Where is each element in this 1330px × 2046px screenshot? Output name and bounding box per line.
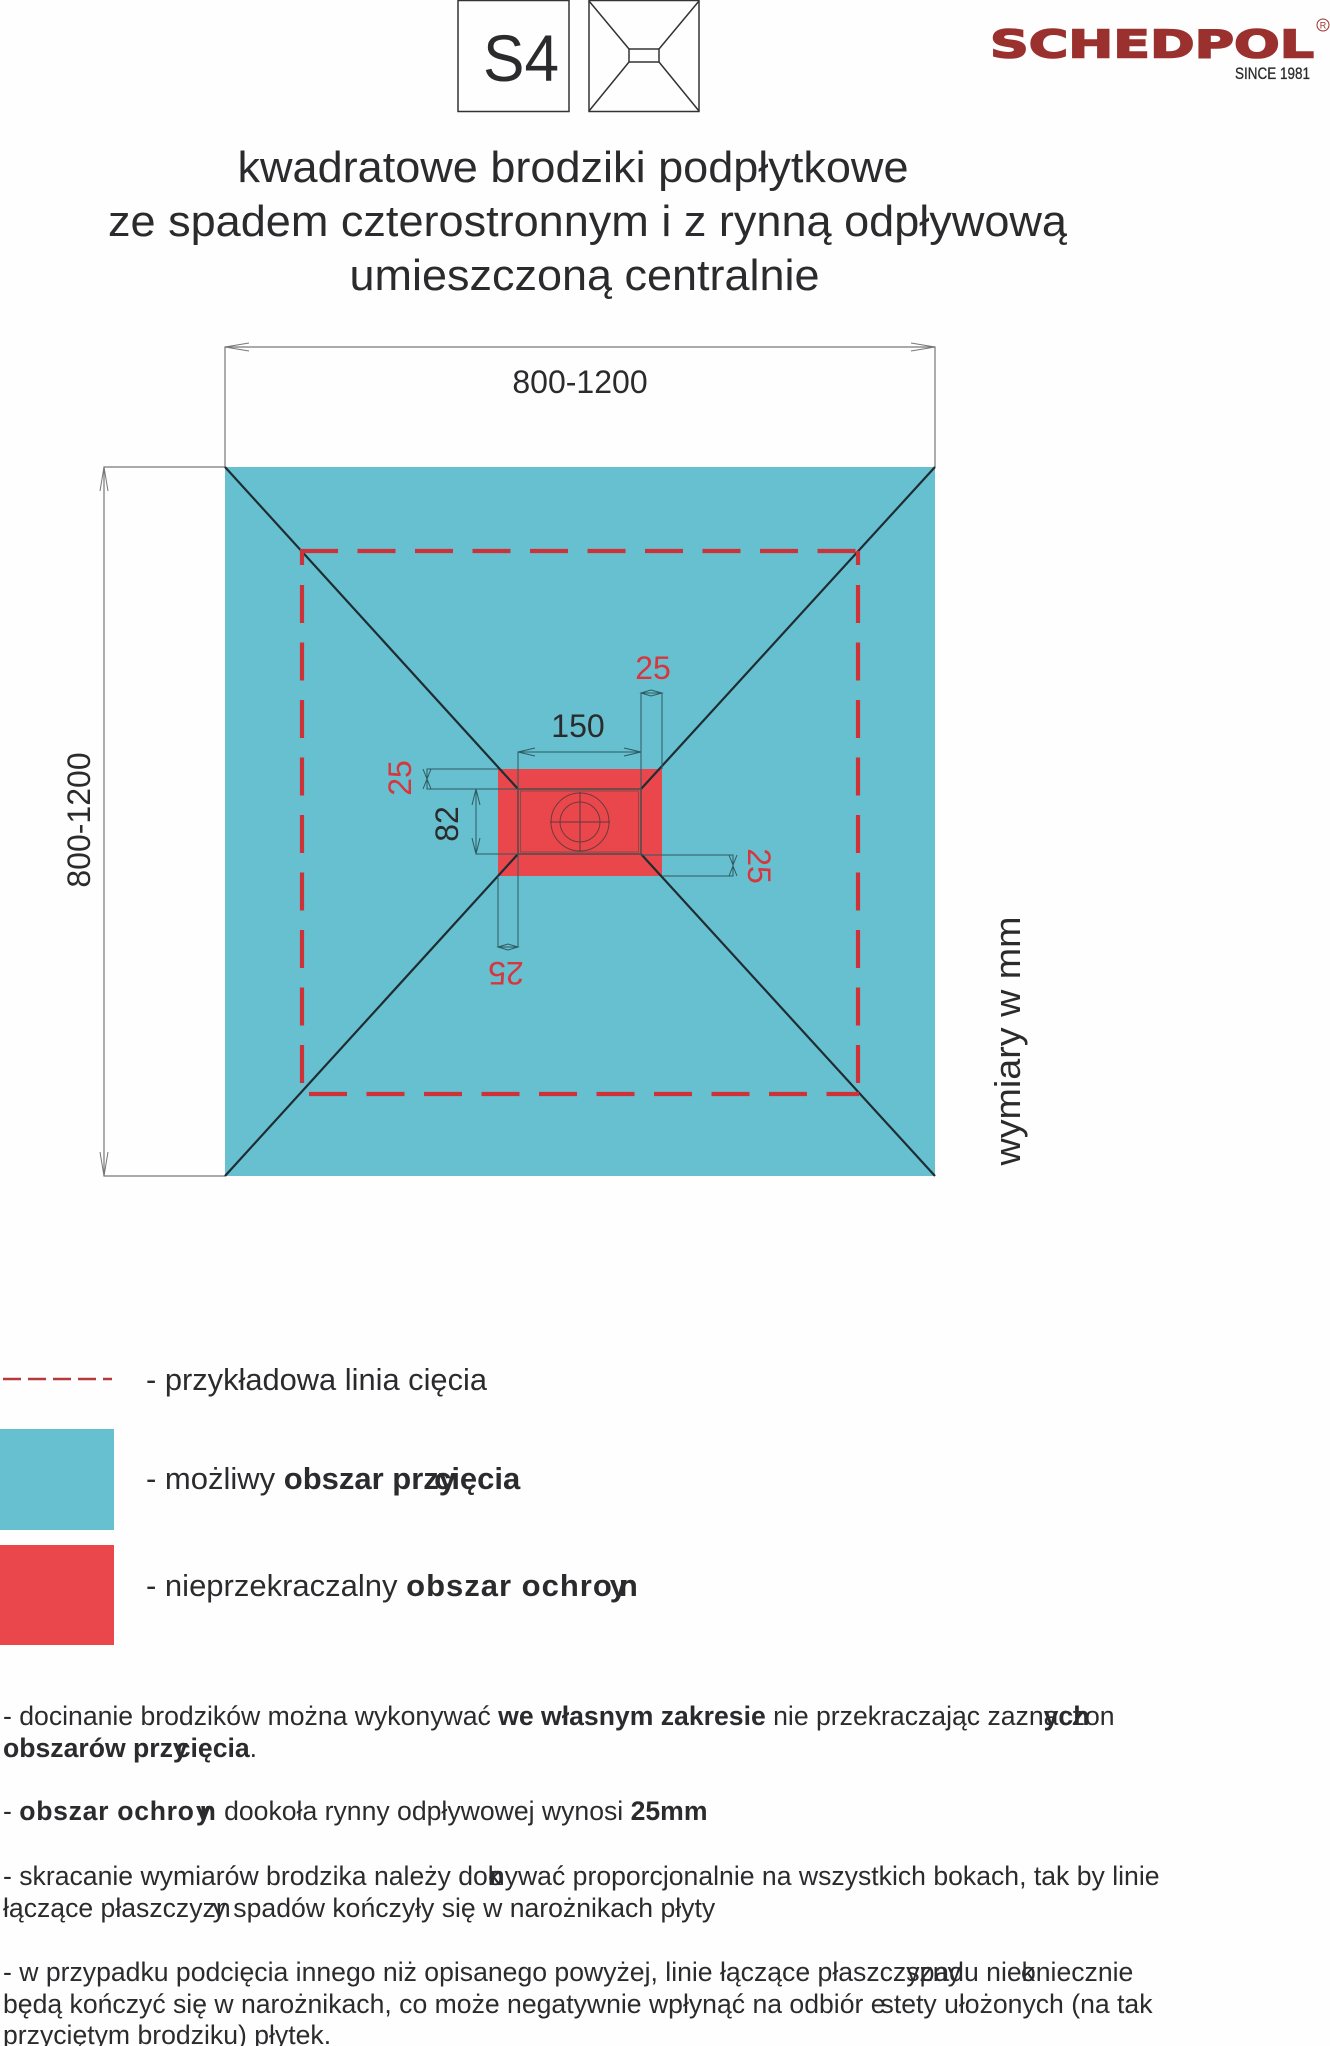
note 3: łączące płaszczyzny spadów kończyły się w narożnikach płyty xyxy=(3,1893,716,1923)
icon: four-way slope tray symbol xyxy=(589,0,699,112)
dimension text: 25 bottom: 25 xyxy=(488,955,524,991)
slope join lines xyxy=(225,467,935,1176)
dimension text: 82: 82 xyxy=(429,806,465,842)
title: umieszczoną centralnie xyxy=(350,251,820,300)
note 4: - w przypadku podcięcia innego niż opisanego powyżej, linie łączące płaszczyzny spadu niekoniecznie xyxy=(3,1957,1133,1987)
note 1: - docinanie brodzików można wykonywać we własnym zakresie nie przekraczając zaznaczonych xyxy=(3,1701,1115,1731)
note 3 xyxy=(3,1861,1160,1923)
legend: protection area: - nieprzekraczalny obszar ochrony xyxy=(146,1568,638,1603)
example cut line, dashed xyxy=(300,551,859,1094)
dimension: width 800-1200 xyxy=(225,343,935,467)
dimension text: 25 right: 25 xyxy=(741,848,777,884)
note 4 xyxy=(3,1957,1153,2046)
note 1 xyxy=(3,1701,1115,1763)
icon: S4 type label box xyxy=(458,0,569,112)
note 4: będą kończyć się w narożnikach, co może negatywnie wpłynąć na odbiór estety ułożonych (na tak xyxy=(3,1989,1153,2019)
title xyxy=(108,143,1068,300)
logo: SCHEDPOL since 1981 xyxy=(990,19,1329,83)
legend: trimming area: - możliwy obszar przycięcia xyxy=(146,1461,521,1496)
dimension text: 25 top: 25 xyxy=(635,650,671,686)
title: ze spadem czterostronnym i z rynną odpływową xyxy=(108,197,1068,246)
note 2: - obszar ochrony dookoła rynny odpływowej wynosi 25mm xyxy=(3,1796,707,1826)
legend: trimming area xyxy=(0,1429,521,1530)
note 1: obszarów przycięcia. xyxy=(3,1733,257,1763)
legend: cut line: - przykładowa linia cięcia xyxy=(146,1362,488,1397)
dimension: height 800-1200: 800-1200 xyxy=(61,752,97,888)
dimension: height 800-1200 xyxy=(61,467,225,1176)
icon: S4 type label box: S4 xyxy=(483,21,559,95)
note: dimensions in mm: wymiary w mm xyxy=(987,916,1028,1167)
logo: SCHEDPOL since 1981: SCHEDPOL xyxy=(990,22,1314,66)
logo: SCHEDPOL since 1981: SINCE 1981 xyxy=(1235,64,1310,83)
center dimension lines xyxy=(423,690,737,950)
dimension: width 800-1200: 800-1200 xyxy=(512,364,648,400)
drain channel xyxy=(518,789,641,854)
protection zone xyxy=(498,769,662,876)
dimension text: 25 left: 25 xyxy=(382,760,418,796)
panel: tray plan, trimming area xyxy=(225,467,935,1176)
logo: SCHEDPOL since 1981: R xyxy=(1320,20,1327,30)
text block: trimming notes xyxy=(3,1701,1160,2046)
note 3: - skracanie wymiarów brodzika należy dokonywać proporcjonalnie na wszystkich bokach, tak by linie xyxy=(3,1861,1160,1891)
title: kwadratowe brodziki podpłytkowe xyxy=(238,143,908,192)
dimension text: 150: 150 xyxy=(551,708,605,744)
legend: protection area xyxy=(0,1545,638,1645)
